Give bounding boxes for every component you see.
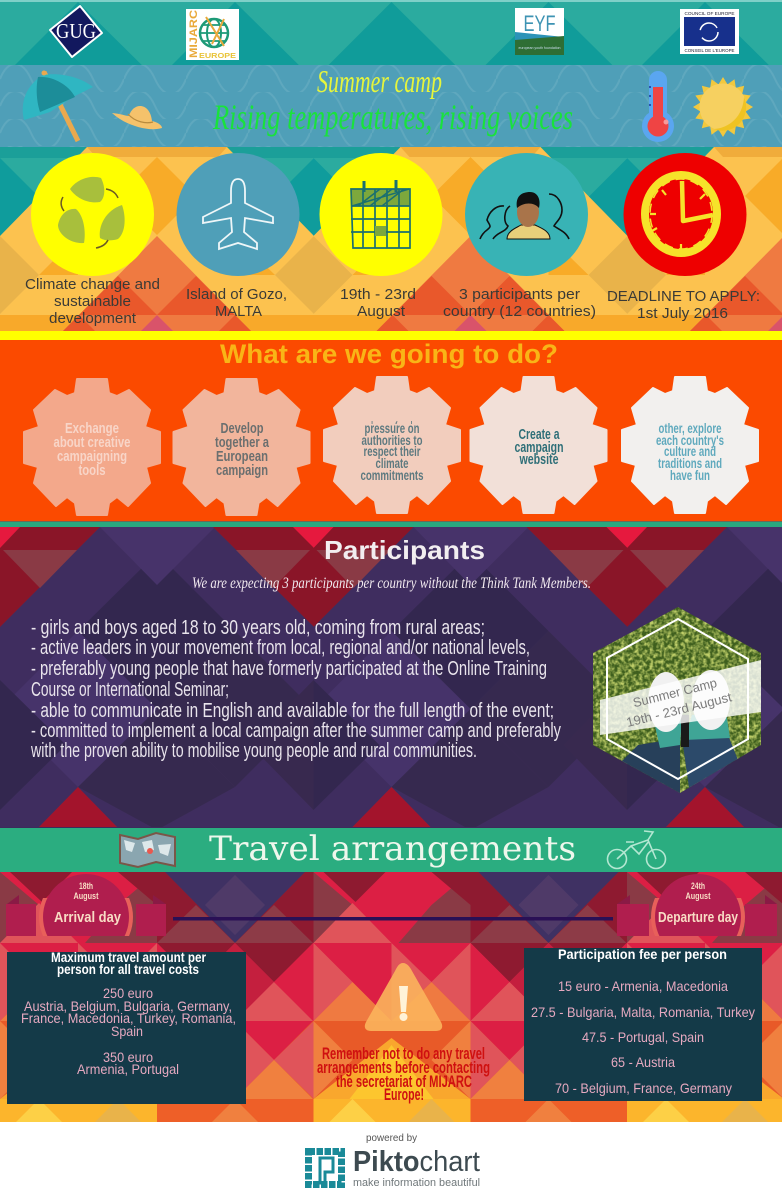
warning text: arrangements before contacting [317, 1058, 490, 1077]
gear: explore ways: climate [376, 456, 409, 471]
icon: Piktochart logo [308, 1152, 342, 1184]
caption: location: Island of Gozo, [186, 286, 287, 303]
warning text [317, 1044, 490, 1104]
gear: get to know: traditions and [658, 456, 722, 471]
logos row [50, 6, 739, 60]
icon: warning triangle [365, 963, 442, 1031]
caption: deadline [607, 288, 760, 322]
caption: participants: country (12 countries) [443, 303, 596, 320]
gear: develop: European [216, 448, 268, 465]
heading: Participants [324, 535, 485, 565]
caption: climate: sustainable [54, 293, 131, 310]
gear: website: campaign [514, 440, 564, 456]
section: top background pattern [0, 0, 782, 331]
title line 2: Rising temperatures, rising voices [212, 97, 573, 137]
gear: explore ways: pressure on [364, 421, 420, 436]
box: participation fee: 65 - Austria [611, 1054, 675, 1070]
caption: climate [25, 276, 160, 327]
logo: MIJARC Europe: EUROPE [199, 53, 236, 60]
banner: summer camp title [0, 63, 782, 147]
box: maximum travel amount: Austria, Belgium, Bulgaria, Germany, [24, 998, 232, 1014]
gear: website: Create a [518, 427, 560, 443]
circle: deadline clock [624, 153, 746, 276]
gear: exchange: Exchange [65, 420, 119, 437]
box: maximum travel amount: Armenia, Portugal [77, 1061, 179, 1077]
gear: get to know: Get to know each [650, 409, 730, 424]
photo: feet on grass hexagon [590, 605, 765, 795]
circle: calendar [320, 153, 442, 276]
box: participation fee: 70 - Belgium, France, Germany [555, 1080, 732, 1096]
logo: GUG: GUG [56, 19, 96, 43]
warning text: Europe! [384, 1085, 424, 1104]
circle icons row [31, 153, 746, 276]
box: maximum travel amount: Spain [111, 1023, 143, 1039]
gear: get to know: other, explore [658, 421, 722, 436]
criteria list: Course or International Seminar; [31, 679, 229, 701]
panel: travel arrangements [0, 827, 782, 1122]
caption: participants [443, 286, 596, 320]
gear: exchange: campaigning [57, 448, 127, 465]
circle: plane [176, 153, 300, 276]
box: maximum travel amount: France, Macedonia, Turkey, Romania, [21, 1010, 236, 1026]
circle captions [25, 276, 760, 327]
badge: arrival day: Arrival day [54, 909, 122, 926]
criteria list: - girls and boys aged 18 to 30 years old, coming from rural areas; [31, 617, 485, 639]
box: maximum travel amount: 350 euro [103, 1049, 153, 1065]
timeline line [173, 917, 613, 920]
icon: map [120, 833, 175, 867]
footer: powered by Piktochart: powered by [366, 1133, 417, 1144]
criteria list: - preferably young people that have formerly participated at the Online Training [31, 658, 547, 680]
gear: explore ways [324, 377, 460, 513]
circle: participants [465, 153, 588, 276]
gear: get to know: have fun [670, 468, 710, 483]
badge: departure day: 24th [691, 881, 705, 891]
box: participation fee: Participation fee per person [558, 946, 727, 962]
criteria list [30, 617, 561, 762]
criteria list: with the proven ability to mobilise young people and rural communities. [30, 740, 477, 762]
caption: location [186, 286, 287, 320]
criteria list: - able to communicate in English and available for the full length of the event; [31, 700, 554, 722]
panel: participants [0, 527, 782, 828]
circle: climate change [31, 153, 154, 276]
icon: sun hat [112, 106, 162, 129]
photo: feet on grass hexagon: 19th - 23rd August [625, 689, 733, 730]
logo: MIJARC Europe [186, 9, 239, 60]
box: participation fee: 47.5 - Portugal, Spain [582, 1029, 704, 1045]
box: maximum travel amount: person for all travel costs [57, 962, 199, 977]
criteria list: - committed to implement a local campaign after the summer camp and preferably [31, 720, 561, 742]
logo: Council of Europe: COUNCIL OF EUROPE [684, 11, 734, 16]
gear: explore ways: authorities to [362, 433, 422, 448]
criteria list: - active leaders in your movement from local, regional and/or national levels, [31, 637, 530, 659]
box: maximum travel amount [7, 950, 246, 1104]
box: maximum travel amount: Maximum travel amount per [51, 950, 207, 965]
caption: climate: Climate change and [25, 276, 160, 293]
logo: EYF [515, 8, 564, 55]
badge: arrival day [6, 874, 166, 936]
gear: exchange [24, 379, 160, 515]
gear: get to know: culture and [664, 444, 716, 459]
gear: explore ways: commitments [360, 468, 424, 483]
icon: thermometer [642, 71, 674, 142]
box: maximum travel amount: 250 euro [103, 985, 153, 1001]
box: participation fee: 27.5 - Bulgaria, Malta, Romania, Turkey [531, 1004, 755, 1020]
gear: develop: Develop [220, 420, 264, 437]
icon: bicycle [608, 831, 666, 868]
title line 1: Summer camp [317, 63, 442, 99]
gear: website: website [519, 452, 558, 468]
badge: departure day: August [686, 891, 710, 901]
footer: powered by Piktochart [0, 1122, 782, 1200]
footer: powered by Piktochart: Piktochart [353, 1146, 480, 1178]
heading: Travel arrangements [209, 829, 576, 869]
caption: deadline: DEADLINE TO APPLY: [607, 288, 760, 305]
icon: umbrella [23, 70, 93, 141]
photo: feet on grass hexagon: Summer Camp [631, 675, 718, 710]
gear: develop [174, 379, 310, 515]
gear: website [470, 377, 606, 513]
subheading: We are expecting 3 participants per country without the Think Tank Members. [192, 575, 591, 592]
badge: departure day [617, 874, 777, 936]
icon: sun [693, 77, 753, 137]
footer: powered by Piktochart: make information beautiful [353, 1177, 480, 1189]
box: participation fee: 15 euro - Armenia, Macedonia [558, 978, 728, 994]
gear: exchange: tools [78, 462, 106, 479]
warning text: the secretariat of MIJARC [336, 1072, 472, 1091]
panel: what are we going to do [0, 331, 782, 527]
box: participation fee [524, 946, 762, 1101]
badge: departure day: Departure day [658, 909, 739, 926]
caption: climate: development [49, 310, 137, 327]
logo: EYF: EYF [524, 11, 556, 36]
caption: deadline: 1st July 2016 [637, 305, 728, 322]
gear: develop: together a [215, 434, 269, 451]
gear: develop: campaign [216, 462, 268, 479]
gear: explore ways: respect their [364, 444, 421, 459]
logo: EYF: european youth foundation [518, 46, 561, 50]
logo: Council of Europe [680, 9, 739, 54]
warning text: Remember not to do any travel [322, 1044, 485, 1063]
logo: GUG [50, 6, 102, 57]
heading: What are we going to do? [220, 339, 558, 369]
caption: dates [340, 286, 416, 320]
badge: arrival day: 18th [79, 881, 93, 891]
gear: get to know: each country's [656, 433, 724, 448]
gear: get to know [622, 377, 758, 513]
caption: participants: 3 participants per [459, 286, 580, 303]
caption: location: MALTA [215, 303, 262, 320]
badge: arrival day: August [74, 891, 98, 901]
caption: dates: August [357, 303, 406, 320]
gear: exchange: about creative [54, 434, 130, 451]
logo: Council of Europe: CONSEIL DE L'EUROPE [684, 48, 734, 53]
logo: MIJARC Europe: MIJARC [188, 10, 200, 58]
caption: dates: 19th - 23rd [340, 286, 416, 303]
gear: explore ways: Explore ways to put [364, 409, 420, 424]
